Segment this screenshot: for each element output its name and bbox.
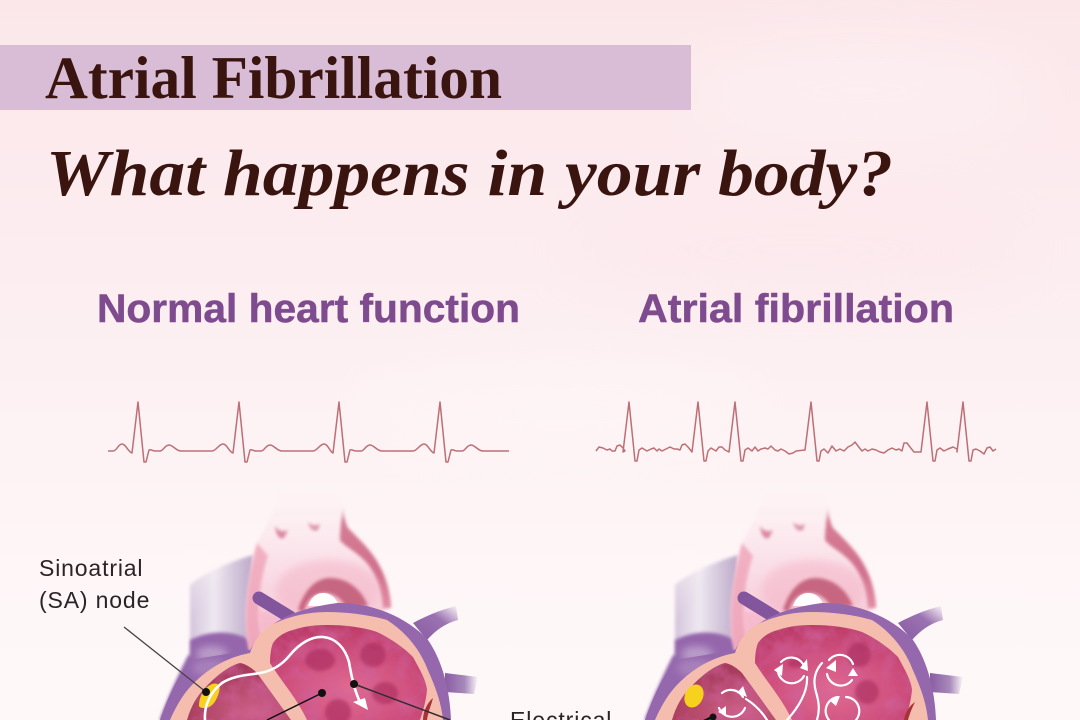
loop arrowheads (718, 659, 858, 716)
ECG trace: atrial fibrillation (596, 402, 996, 461)
label: sinoatrial node: Sinoatrial (39, 555, 143, 581)
electrical signal path (205, 637, 360, 720)
chamber blobs (305, 643, 398, 720)
marker: electrical signal (702, 714, 716, 720)
title banner (0, 45, 691, 111)
leader and marker: electrical signal (350, 680, 450, 720)
SA node (681, 681, 707, 711)
vessel: small red valve (423, 698, 433, 720)
SA node (199, 683, 220, 708)
arrowhead (353, 698, 368, 710)
label: sinoatrial node: (SA) node (39, 587, 150, 613)
heart: atrial fibrillation (645, 488, 963, 720)
subtitle: What happens in your body? (46, 137, 893, 210)
chamber blobs (788, 643, 879, 704)
leader and marker: atria (267, 689, 326, 720)
marker: SA node (202, 688, 210, 696)
chaotic signal loops (719, 655, 859, 720)
vessel: small red valve (904, 702, 915, 720)
heading: atrial fibrillation: Atrial fibrillation (638, 287, 954, 331)
leader: SA node (124, 627, 206, 692)
heart: normal function (124, 488, 478, 720)
ECG trace: normal rhythm (108, 402, 509, 462)
title banner: Atrial Fibrillation (45, 45, 502, 111)
heading: normal heart function: Normal heart function (97, 287, 520, 331)
